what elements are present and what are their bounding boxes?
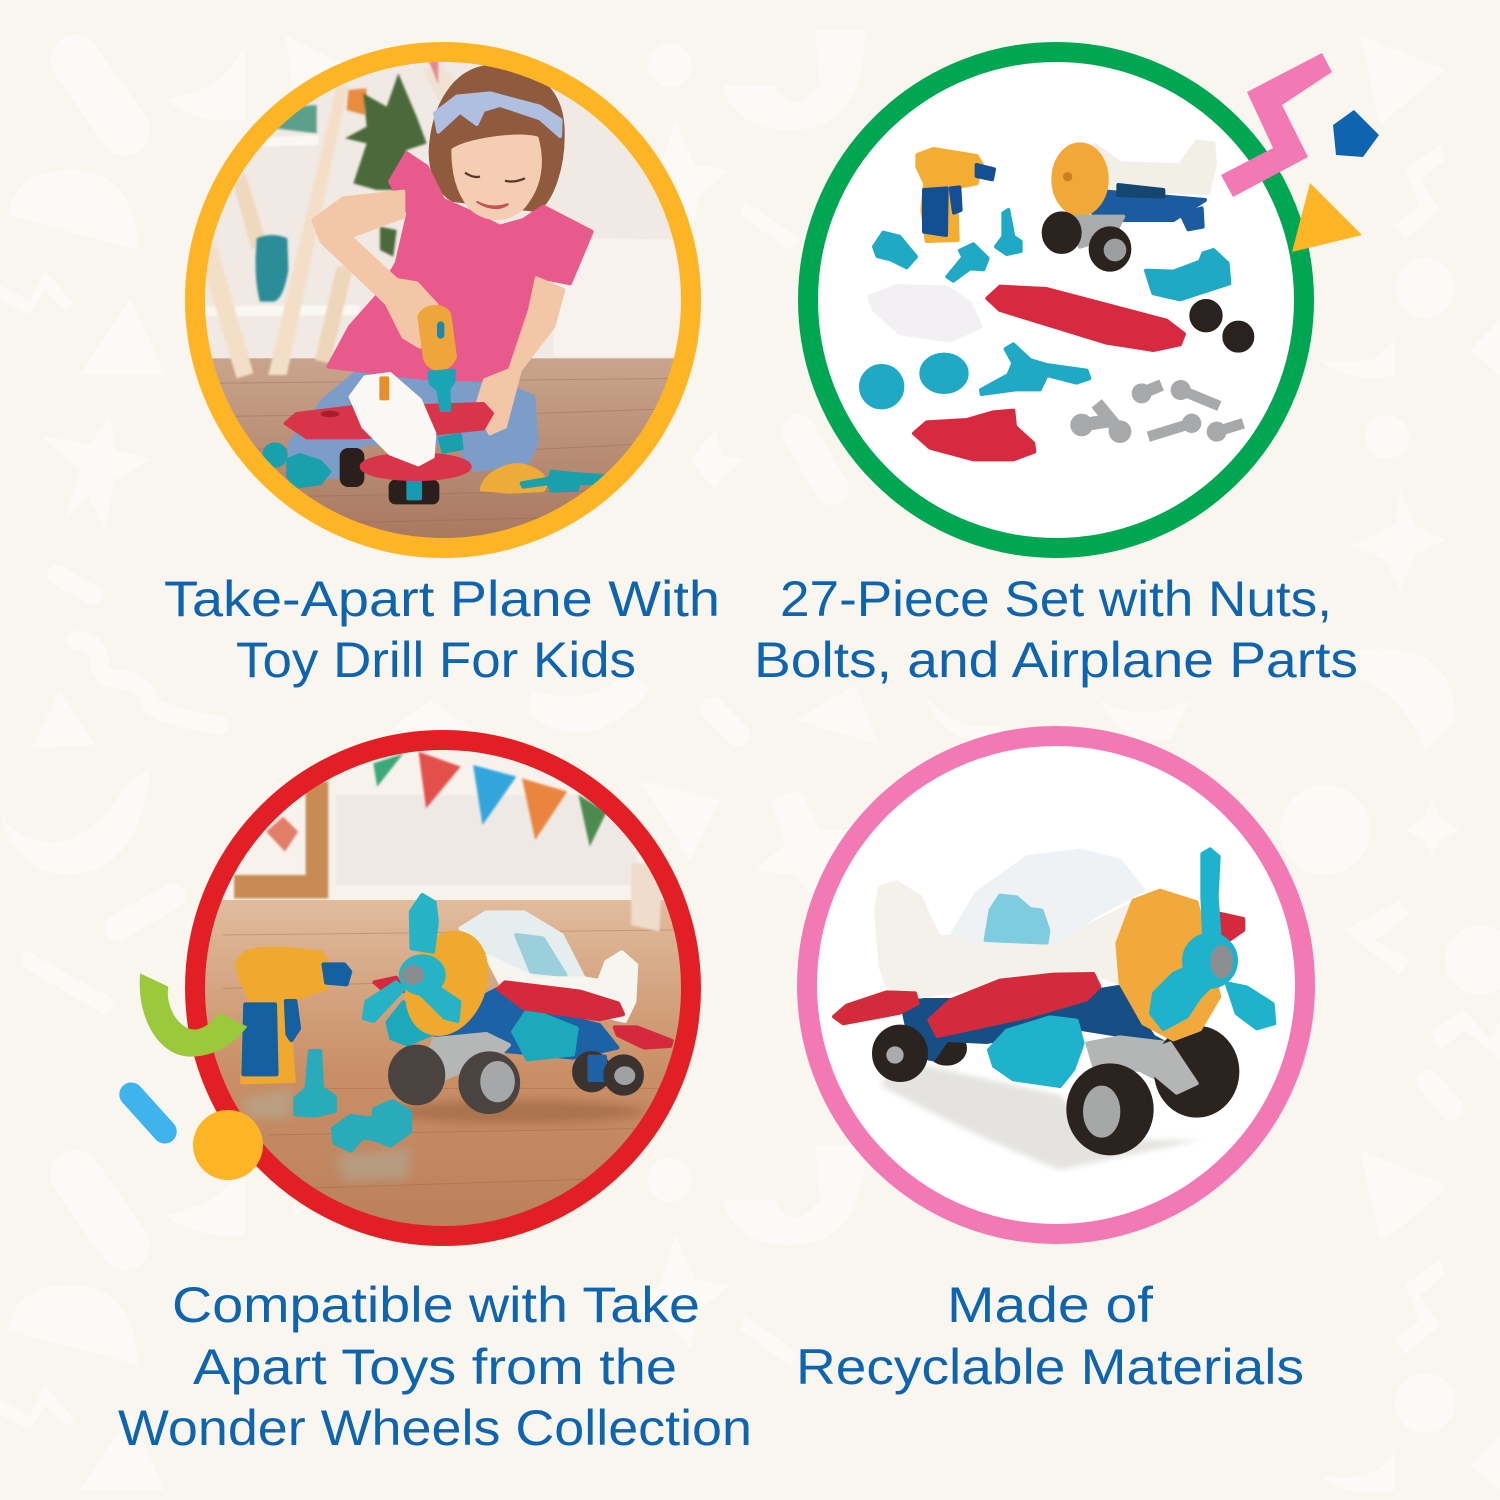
assembled plane <box>1044 142 1215 270</box>
wheel hub <box>1085 1088 1118 1136</box>
propeller upper blade <box>1202 849 1219 933</box>
window frame <box>234 782 328 898</box>
drill grip <box>244 1004 276 1074</box>
soft shadow <box>880 1060 1200 1170</box>
pink ring <box>807 736 1305 1234</box>
caption: take-apart plane: Take-Apart Plane With <box>164 571 720 627</box>
red ring <box>195 740 691 1236</box>
decoration: blue pill <box>114 1077 182 1149</box>
seat in canopy <box>516 935 565 975</box>
teal pod <box>288 455 329 487</box>
rear wheel <box>874 1027 926 1080</box>
shirt <box>328 153 592 380</box>
decoration: yellow triangle <box>1292 183 1362 252</box>
drill body <box>237 949 327 1082</box>
orange nose <box>1117 891 1219 1039</box>
panel: child building toy plane photo <box>205 62 674 538</box>
red main wing <box>987 287 1184 350</box>
propeller hub <box>1184 935 1236 987</box>
panel: assembled plane photo <box>808 737 1304 1233</box>
glass vase <box>256 235 288 302</box>
front near wheel <box>1068 1065 1152 1153</box>
propeller right blade <box>1227 983 1274 1028</box>
face <box>453 137 540 218</box>
caption: compatible toys: Wonder Wheels Collection <box>118 1400 752 1456</box>
grey landing gear <box>1087 1037 1200 1093</box>
caption: compatible toys: Compatible with Take <box>172 1277 700 1333</box>
caption: 27-piece set: Bolts, and Airplane Parts <box>754 632 1358 688</box>
shadow under plane <box>388 1100 644 1123</box>
drill button <box>439 323 442 337</box>
black nuts <box>1191 301 1252 351</box>
blurred stool leg <box>631 863 663 932</box>
skirting board <box>553 237 683 357</box>
upper wing <box>286 404 492 437</box>
canopy <box>461 912 583 978</box>
playroom wall <box>205 62 674 358</box>
teal engine right <box>513 1009 577 1059</box>
propeller blades <box>411 895 437 952</box>
teal engine covers and propeller <box>861 344 1089 407</box>
panel: party room plane photo <box>205 751 681 1226</box>
shelf unit <box>203 60 470 378</box>
propeller left blade <box>1151 963 1213 1029</box>
front wheels <box>390 1047 443 1103</box>
wooden floor <box>205 900 681 1226</box>
white panelled wall <box>336 795 637 885</box>
green ring <box>808 52 1304 548</box>
eyes and smile <box>465 173 525 182</box>
drill nose <box>324 964 350 984</box>
soft floor reflections <box>242 1088 411 1182</box>
blue belly <box>903 987 1163 1059</box>
teal strut <box>440 435 462 452</box>
seat inside canopy <box>986 896 1048 943</box>
rear wheels <box>574 1053 609 1090</box>
white disc <box>808 737 1304 1233</box>
orange stick <box>381 378 387 398</box>
headband <box>435 93 561 136</box>
white body and fin <box>486 952 636 1021</box>
clear canopy <box>869 286 981 341</box>
teal bolts and bits <box>874 210 1229 299</box>
caption: recyclable materials: Made of <box>947 1277 1153 1333</box>
lower wing <box>362 454 470 479</box>
plant <box>345 73 427 257</box>
teal bit <box>296 1051 335 1116</box>
caption: take-apart plane: Toy Drill For Kids <box>236 632 636 688</box>
red tail plane <box>914 411 1034 459</box>
grey strut over wheel <box>1137 1043 1197 1093</box>
fuselage wheels <box>342 450 362 485</box>
decoration: blue pentagon <box>1333 110 1379 157</box>
drill trigger <box>286 1001 299 1040</box>
far red wing <box>1221 914 1243 939</box>
bunting <box>373 752 607 847</box>
wing hole <box>321 411 339 417</box>
jeans <box>290 367 537 477</box>
teal engine <box>989 1017 1083 1086</box>
far wing <box>375 978 403 991</box>
toy drill <box>419 307 455 369</box>
hair back <box>431 67 563 210</box>
main red wing <box>929 974 1099 1036</box>
teal bolt <box>333 1101 410 1151</box>
wooden floor <box>212 358 674 538</box>
grey bolts <box>1070 380 1243 443</box>
decoration: yellow dot <box>193 1110 263 1180</box>
caption: recyclable materials <box>796 1277 1304 1395</box>
caption: 27-piece set: 27-Piece Set with Nuts, <box>780 571 1332 627</box>
caption: take-apart plane <box>164 571 720 688</box>
hub centre <box>1212 947 1231 976</box>
drill collar <box>429 371 454 410</box>
decoration: pink zigzag <box>1221 53 1332 197</box>
propeller hub <box>401 956 443 994</box>
clear canopy <box>953 851 1143 943</box>
orange ring <box>195 52 691 548</box>
tail wing <box>615 1027 671 1048</box>
orange dome <box>482 465 546 492</box>
white fuselage <box>351 374 434 464</box>
panel: 27-piece parts layout <box>808 52 1304 548</box>
right arm <box>313 192 437 347</box>
toy drill <box>917 149 994 241</box>
caption: compatible toys <box>118 1277 752 1456</box>
far rear wheel <box>928 1033 965 1064</box>
blurred red toy <box>266 817 298 852</box>
teal engine left <box>264 444 286 466</box>
teal propeller on floor <box>522 472 603 491</box>
front far wheel <box>1156 1028 1237 1116</box>
white disc <box>808 52 1304 548</box>
orange nose <box>395 925 498 1042</box>
caption: compatible toys: Apart Toys from the <box>193 1339 677 1395</box>
caption: recyclable materials: Recyclable Materials <box>796 1339 1304 1395</box>
fuselage and tail fin <box>876 882 1133 997</box>
left arm <box>477 278 563 433</box>
landing gear <box>423 1034 509 1085</box>
decoration: green arc arrow <box>140 973 247 1057</box>
room wall <box>185 735 700 905</box>
tail wing <box>834 992 918 1023</box>
caption: 27-piece set <box>754 571 1358 688</box>
teal engine left <box>388 1002 430 1044</box>
red wing <box>498 982 623 1019</box>
blue fuselage <box>434 989 617 1058</box>
